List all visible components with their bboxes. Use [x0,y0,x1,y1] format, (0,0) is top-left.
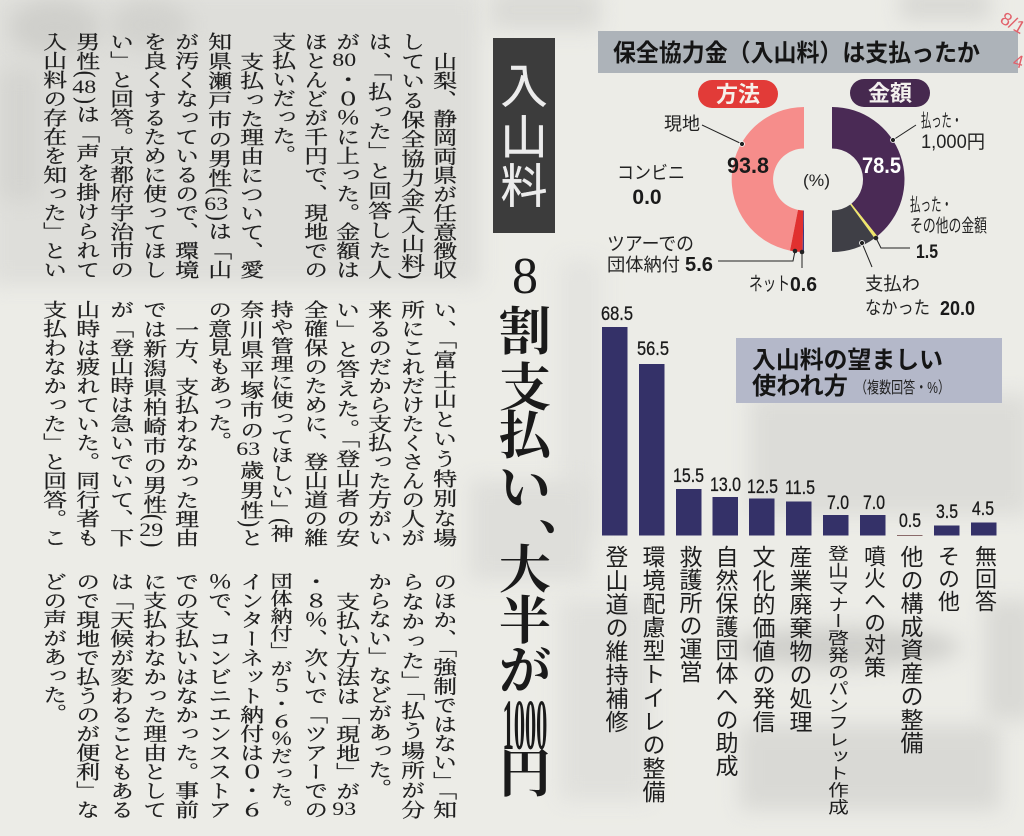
bar category labels [602,545,997,815]
chart heading bar [598,31,1018,73]
label: ツアーでの団体納付 5.6: 団体納付 [607,255,680,275]
article body: second block of columns: 山時は疲れていた。同行者も [72,300,99,547]
bar values: 0.5 [899,511,921,532]
label: 払った その他の金額 1.5: その他の金額 [910,216,987,236]
article body: third block of columns: インターネット納付は０・６ [236,572,263,819]
article body: second block of columns: 持や管理に使ってほしい」(神 [268,300,294,543]
article body: second block of columns [39,300,457,547]
main headline: 8割支払い、大半が1000円: 、 [497,518,554,570]
main headline: 8割支払い、大半が1000円: 半 [499,594,551,651]
label: 払った 1,000円 [890,111,985,153]
main headline: 8割支払い、大半が1000円: 支 [499,361,551,418]
article body: first block of columns: 支払った理由について、愛 [236,52,263,279]
main headline: 8割支払い、大半が1000円: が [499,644,551,701]
label: ネット 0.6: ネット [749,274,790,295]
article body: second block of columns: い、「富士山という特別な場 [429,300,456,547]
bar category labels: 無回答 [972,545,997,612]
label: 支払わなかった 20.0 [860,240,975,320]
label: コンビニ 0.0: コンビニ [617,163,685,183]
bar category labels: 登山道の維持補修 [602,545,628,733]
article body: second block of columns: 来るのだから支払った方がい [364,300,391,547]
chart heading bar: （複数回答・%） [855,379,950,397]
main headline: 8割支払い、大半が1000円: 割 [499,305,551,362]
main headline: 8割支払い、大半が1000円: 払 [499,409,551,466]
article body: second block of columns: 所にこれだけたくさんの人が [397,300,424,547]
article body: first block of columns: 入山料の存在を知った」とい [39,32,66,279]
handwritten date mark [997,8,1024,72]
heading label: 入山料 dark box: 料 [500,160,548,213]
label: コンビニ 0.0 [617,163,685,209]
bar values: 3.5 [936,502,958,523]
bar category labels: 産業廃棄物の処理 [786,545,812,733]
bar category labels: 環境配慮型トイレの整備 [639,545,665,803]
article body: third block of columns [39,572,457,819]
label: ネット 0.6 [749,250,817,296]
pill: 方法 [698,80,778,108]
label: percent unit: (%) [803,171,830,190]
article body: first block of columns: 支払いだった。 [268,32,295,164]
pill: 方法: 方法 [716,82,760,107]
bar category labels: 文化的価値の発信 [749,545,775,733]
main headline: 8割支払い、大半が1000円: 8 [512,248,538,305]
article body: third block of columns: 団体納付」が５・６％だった。 [268,572,294,817]
article body: second block of columns: い」と答えた。「登山者の安 [332,300,359,547]
bar category labels: 登山マナー啓発のパンフレット作成 [825,545,848,815]
article body: first block of columns: い」と回答。京都府宇治市の [106,32,133,279]
bar values: 11.5 [785,478,815,499]
bar category labels: 自然保護団体への助成 [712,545,738,777]
heading label: 入山料 dark box: 入 [500,60,548,113]
main headline: 8割支払い、大半が1000円: い [499,461,551,518]
article body: second block of columns: が「登山時は急いでいて、下 [106,300,133,547]
donut half: amount paid [832,107,904,252]
label: 現地 93.8: 93.8 [727,153,769,178]
heading label: 入山料 dark box [493,38,555,233]
label: 払った その他の金額 1.5 [874,195,987,263]
label: 支払わなかった 20.0: 20.0 [940,298,975,320]
bar category labels: 救護所の運営 [676,545,702,683]
bar values: 7.0 [827,493,849,514]
main headline: 8割支払い、大半が1000円: 1000 [503,685,547,765]
bar values [601,304,994,532]
article body: third block of columns: どの声があった。 [39,572,66,722]
label: ツアーでの団体納付 5.6: ツアーでの [607,234,694,255]
pill: 金額 [850,79,930,107]
label: 78.5: 78.5 [862,153,901,178]
article body: first block of columns: ほとんどが千円で、現地での [300,32,327,279]
article body: first block of columns: 山梨、静岡両県が任意徴収 [429,52,456,279]
article body: third block of columns: ので現地で払うのが便利」な [72,572,99,819]
chart heading bar [736,338,1002,403]
article body: second block of columns: の意見もあった。 [204,300,231,450]
chart heading bar: 入山料の望ましい [752,347,943,374]
label: ツアーでの団体納付 5.6 [607,234,797,276]
article body: third block of columns: は「天候が変わることもある [106,572,133,819]
label: 支払わなかった 20.0: 支払わ [865,274,920,294]
article body: third block of columns: らなかった」「払う場所が分 [397,572,424,819]
bar values: 12.5 [747,477,778,498]
article body: third block of columns: での支払いはなかった。事前 [171,572,198,819]
article body: first block of columns: は、「払った」と回答した人 [364,32,391,279]
article body: third block of columns: からない」などがあった。 [364,572,391,797]
article body: first block of columns: が汚くなっているので、環境 [171,32,198,279]
article body: third block of columns: ％で、コンビニエンスストア [204,572,231,819]
article body: second block of columns: 奈川県平塚市の 63 歳男性)と [236,300,263,547]
bar category labels: その他 [935,545,960,612]
article body: third block of columns: のほか、「強制ではない」「知 [429,572,456,819]
main headline: 8割支払い、大半が1000円: 円 [499,747,551,804]
pill: 金額: 金額 [868,81,912,106]
label: 支払わなかった 20.0: なかった [865,298,930,318]
chart heading bar: 保全協力金（入山料）は支払ったか [613,40,980,67]
article body: second block of columns: 一方、支払わなかった理由 [171,320,198,547]
bar category labels: 噴火への対策 [861,545,886,678]
bar values: 4.5 [972,499,994,520]
article body: first block of columns: している保全協力金(入山料) [397,32,424,279]
main headline: 8割支払い、大半が1000円 [497,248,554,804]
article body: third block of columns: ・８％、次いで「ツアーでの [300,572,327,819]
label: ネット 0.6: 0.6 [790,274,817,296]
article body: third block of columns: に支払わなかった理由として [139,572,166,819]
bars [602,327,996,536]
label: ツアーでの団体納付 5.6: 5.6 [685,254,713,276]
article body: first block of columns: が 80 ・０％に上った。金額は [332,32,359,279]
bar values: 15.5 [673,466,704,487]
article body: third block of columns: 支払い方法は「現地」が 93 [332,592,359,819]
bar values: 56.5 [637,339,669,360]
label: 払った その他の金額 1.5: 払った・ [910,195,952,215]
label: コンビニ 0.0: 0.0 [632,186,662,209]
label: 現地 93.8: 現地 [664,114,700,134]
label: 払った その他の金額 1.5: 1.5 [916,242,938,263]
main headline: 8割支払い、大半が1000円: 大 [499,543,551,600]
article body: second block of columns: 支払わなかった」と回答。こ [39,300,66,547]
label: 払った 1,000円: 1,000円 [921,132,985,153]
article body: second block of columns: 全確保のために、登山道の維 [300,300,327,547]
donut half: payment method [732,107,804,252]
article body: second block of columns: では新潟県柏崎市の男性( 29 ) [139,300,166,547]
article body: first block of columns: 男性( 48 )は「声を掛けられて [72,32,99,279]
heading label: 入山料 dark box: 山 [500,111,548,164]
bar values: 7.0 [863,493,885,514]
article body: first block of columns [39,32,457,279]
bar values: 13.0 [710,475,741,496]
label: 現地 93.8 [664,114,769,178]
top chart: payment of the conservation fee [598,8,1024,320]
bar category labels: 他の構成資産の整備 [897,545,923,754]
chart heading bar: 使われ方 [752,373,848,400]
bottom chart: desired uses of the fee [601,304,1002,536]
article body: first block of columns: を良くするために使ってほし [139,32,166,279]
article body: first block of columns: 知県瀬戸市の男性( 63 )は「山 [204,32,231,279]
label: 払った 1,000円: 払った・ [921,111,962,131]
bar values: 68.5 [601,304,633,325]
